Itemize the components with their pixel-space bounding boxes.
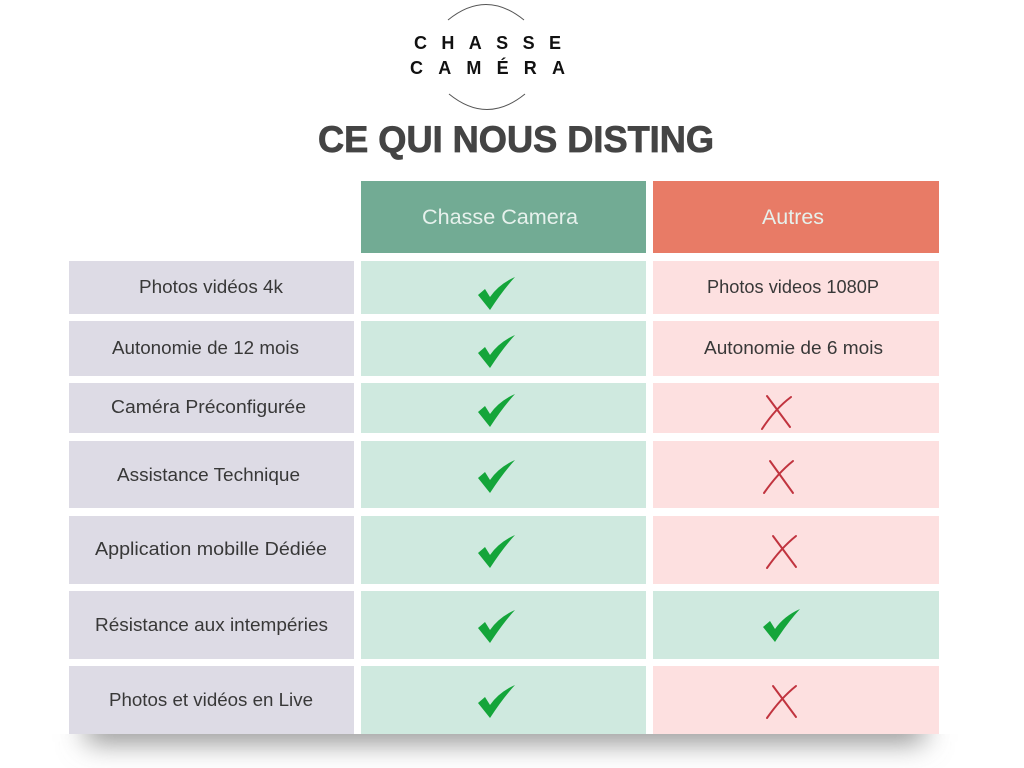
row: Application mobille Dédiée [69, 516, 939, 584]
row: Photos et vidéos en Live: Photos et vidéos en Live [109, 690, 313, 710]
icon: cross [767, 686, 796, 718]
row: Autonomie: Autonomie de 12 mois [112, 338, 299, 358]
logo wordmark line 1: CHASSE [414, 33, 561, 53]
header: Chasse Camera: Chasse Camera [422, 206, 578, 229]
row: Caméra Préconfigurée [69, 383, 939, 433]
icon: cross [767, 536, 796, 568]
row: Autonomie [69, 321, 939, 376]
title: CE QUI NOUS DISTING [318, 119, 714, 160]
row: Résistance aux intempéries [69, 591, 939, 659]
icon: check [478, 394, 515, 427]
row: Assistance Technique: Assistance Technique [117, 465, 300, 485]
logo arc bottom [449, 94, 525, 110]
row: Photos et vidéos en Live [69, 666, 939, 734]
row: Caméra Préconfigurée: Caméra Préconfigurée [111, 397, 306, 417]
icon: check [478, 685, 515, 718]
row: Assistance Technique [69, 441, 939, 508]
icon: check [478, 335, 515, 368]
icon: check [478, 460, 515, 493]
row: Photos vidéos 4k [69, 261, 939, 314]
icon: check [478, 610, 515, 643]
logo arc top [448, 4, 524, 20]
icon: cross [762, 396, 791, 429]
icon: check [478, 535, 515, 568]
row: Résistance aux intempéries: Résistance aux intempéries [95, 615, 328, 635]
row: Photos vidéos 4k: Photos videos 1080P [707, 277, 879, 297]
header: Autres: Autres [762, 206, 824, 229]
row: Autonomie: Autonomie de 6 mois [704, 338, 883, 358]
logo: Chasse Caméra [410, 4, 565, 110]
icon: check [763, 609, 800, 642]
logo wordmark line 2: CAMÉRA [410, 57, 565, 78]
header: Autres [653, 181, 939, 253]
header: Chasse Camera [361, 181, 646, 253]
icon: cross [764, 461, 793, 493]
table drop shadow [86, 712, 924, 742]
row: Photos vidéos 4k: Photos vidéos 4k [139, 277, 284, 297]
icon: check [478, 277, 515, 310]
row: Application mobille Dédiée: Application mobille Dédiée [95, 539, 327, 559]
